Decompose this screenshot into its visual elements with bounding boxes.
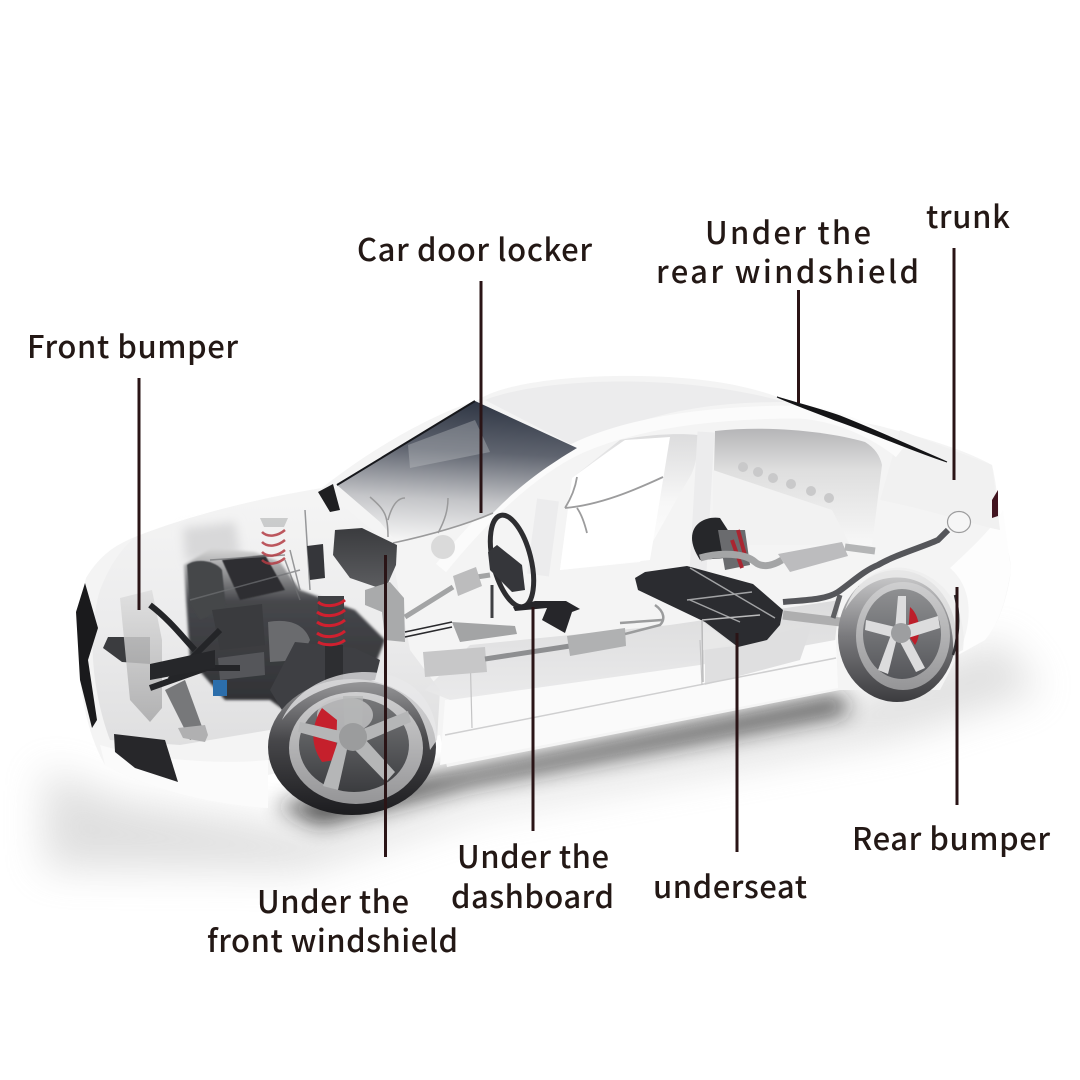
label: Under the front windshield: front windshield: [207, 916, 458, 961]
roof black line: [777, 397, 947, 462]
tail light: [992, 490, 998, 518]
strut bracket: [365, 582, 405, 642]
engine: [150, 510, 385, 742]
rear spring: [858, 586, 878, 616]
brake booster: [333, 528, 397, 590]
leader lines: [139, 248, 957, 857]
upper spring: [260, 518, 288, 564]
label: Under the front windshield: Under the: [257, 877, 409, 922]
red front spring: [317, 596, 345, 690]
steering wheel: [405, 511, 542, 618]
label: Under the dashboard: dashboard: [451, 872, 614, 917]
fuel tank: [635, 566, 783, 682]
roof and rear window: [441, 381, 900, 575]
windshield: [318, 401, 577, 559]
headlight: [103, 637, 150, 664]
radiator: [120, 590, 162, 722]
front grille: [76, 583, 98, 728]
rear wheel: [838, 568, 964, 702]
label: Front bumper: Front bumper: [27, 322, 238, 367]
label: Rear bumper: Rear bumper: [852, 814, 1050, 859]
gear shifter: [405, 622, 517, 642]
fuel cap: [948, 512, 970, 532]
lower door sill: [425, 600, 840, 735]
car body: [78, 376, 1011, 808]
rear exhaust and suspension: [692, 518, 948, 622]
front wheel: [268, 672, 437, 815]
label: Under the front windshield: [207, 877, 458, 961]
label: underseat: underseat: [653, 862, 807, 907]
label: Under the dashboard: Under the: [457, 832, 609, 877]
label: Under the dashboard: [451, 832, 614, 917]
rear seat marks: [738, 462, 834, 503]
exhaust and drive shaft: [423, 605, 663, 677]
label: Under the rear windshield: [656, 208, 919, 292]
label: trunk: trunk: [926, 192, 1010, 237]
front fog lamp: [114, 734, 178, 782]
label: Car door locker: Car door locker: [357, 225, 592, 270]
label: Under the rear windshield: rear windshield: [656, 247, 919, 292]
label: Under the rear windshield: Under the: [705, 208, 871, 253]
pedals and bracket: [513, 601, 580, 633]
door wires: [565, 477, 663, 533]
ground shadow: [45, 640, 1040, 870]
car illustration: [76, 376, 1011, 815]
